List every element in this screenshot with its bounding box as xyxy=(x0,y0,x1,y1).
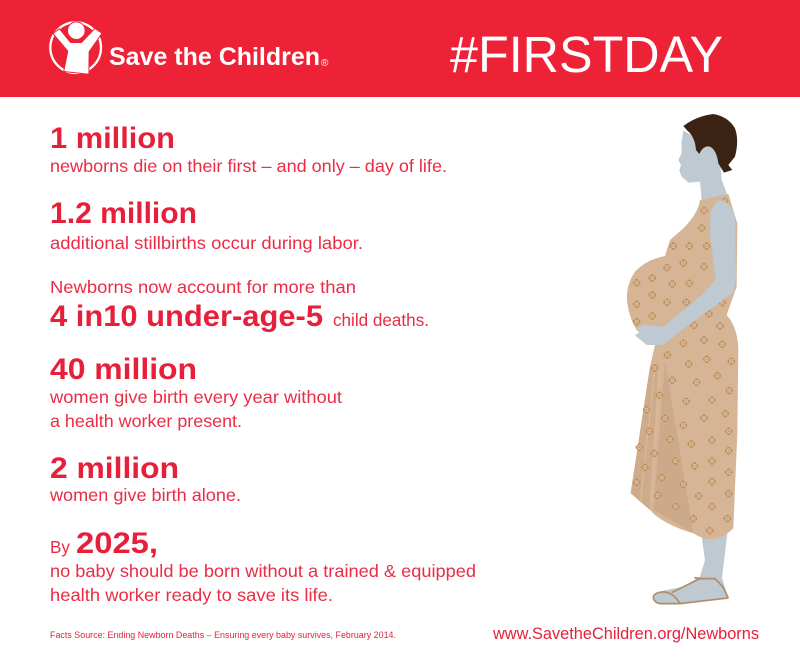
leg and foot xyxy=(653,533,728,603)
source note: Facts Source: Ending Newborn Deaths – Ensuring every baby survives, February 2014. xyxy=(50,630,396,640)
skirt pleats xyxy=(631,360,693,533)
dress xyxy=(627,194,738,539)
sandal xyxy=(653,578,728,604)
illustration: pregnant woman xyxy=(627,114,738,604)
fact: 4 in 10: Newborns now account for more than xyxy=(50,277,356,297)
logo wordmark: Save the Children xyxy=(109,43,320,71)
fact: 4 in 10: 4 in10 under-age-5 xyxy=(50,300,323,333)
header band xyxy=(0,0,800,97)
fact: 4 in 10 xyxy=(50,277,429,333)
icon: child with raised arms xyxy=(50,22,101,74)
registered mark: ® xyxy=(321,58,329,69)
hashtag title: #FIRSTDAY xyxy=(450,26,723,83)
dress pattern xyxy=(633,197,735,534)
hair xyxy=(683,114,737,173)
fact: 1.2 million: 1.2 million xyxy=(50,197,197,230)
fact: by 2025 xyxy=(50,527,476,605)
fact: 1 million xyxy=(50,122,447,176)
fact: by 2025: no baby should be born without a trained & equipped xyxy=(50,561,476,581)
fact: 1.2 million: additional stillbirths occur during labor. xyxy=(50,233,363,253)
fact: 1 million: newborns die on their first – and only – day of life. xyxy=(50,156,447,176)
fact: 2 million xyxy=(49,452,241,505)
arm and hand xyxy=(635,200,736,345)
fact: by 2025: 2025, xyxy=(76,527,158,560)
fact: 4 in 10: child deaths. xyxy=(333,310,429,330)
fact: by 2025: By xyxy=(50,537,70,557)
fact: by 2025: health worker ready to save its life. xyxy=(50,585,333,605)
logo: Save the Children xyxy=(50,22,329,74)
fact: 1 million: 1 million xyxy=(50,122,175,155)
fact: 40 million: a health worker present. xyxy=(50,411,242,431)
fact: 2 million: women give birth alone. xyxy=(49,485,241,505)
fact: 2 million: 2 million xyxy=(50,452,179,485)
head and neck xyxy=(678,131,727,200)
fact: 40 million: 40 million xyxy=(50,353,197,386)
website url: www.SavetheChildren.org/Newborns xyxy=(492,624,759,643)
fact: 40 million: women give birth every year without xyxy=(49,387,342,407)
fact: 40 million xyxy=(49,353,342,431)
fact: 1.2 million xyxy=(50,197,363,253)
